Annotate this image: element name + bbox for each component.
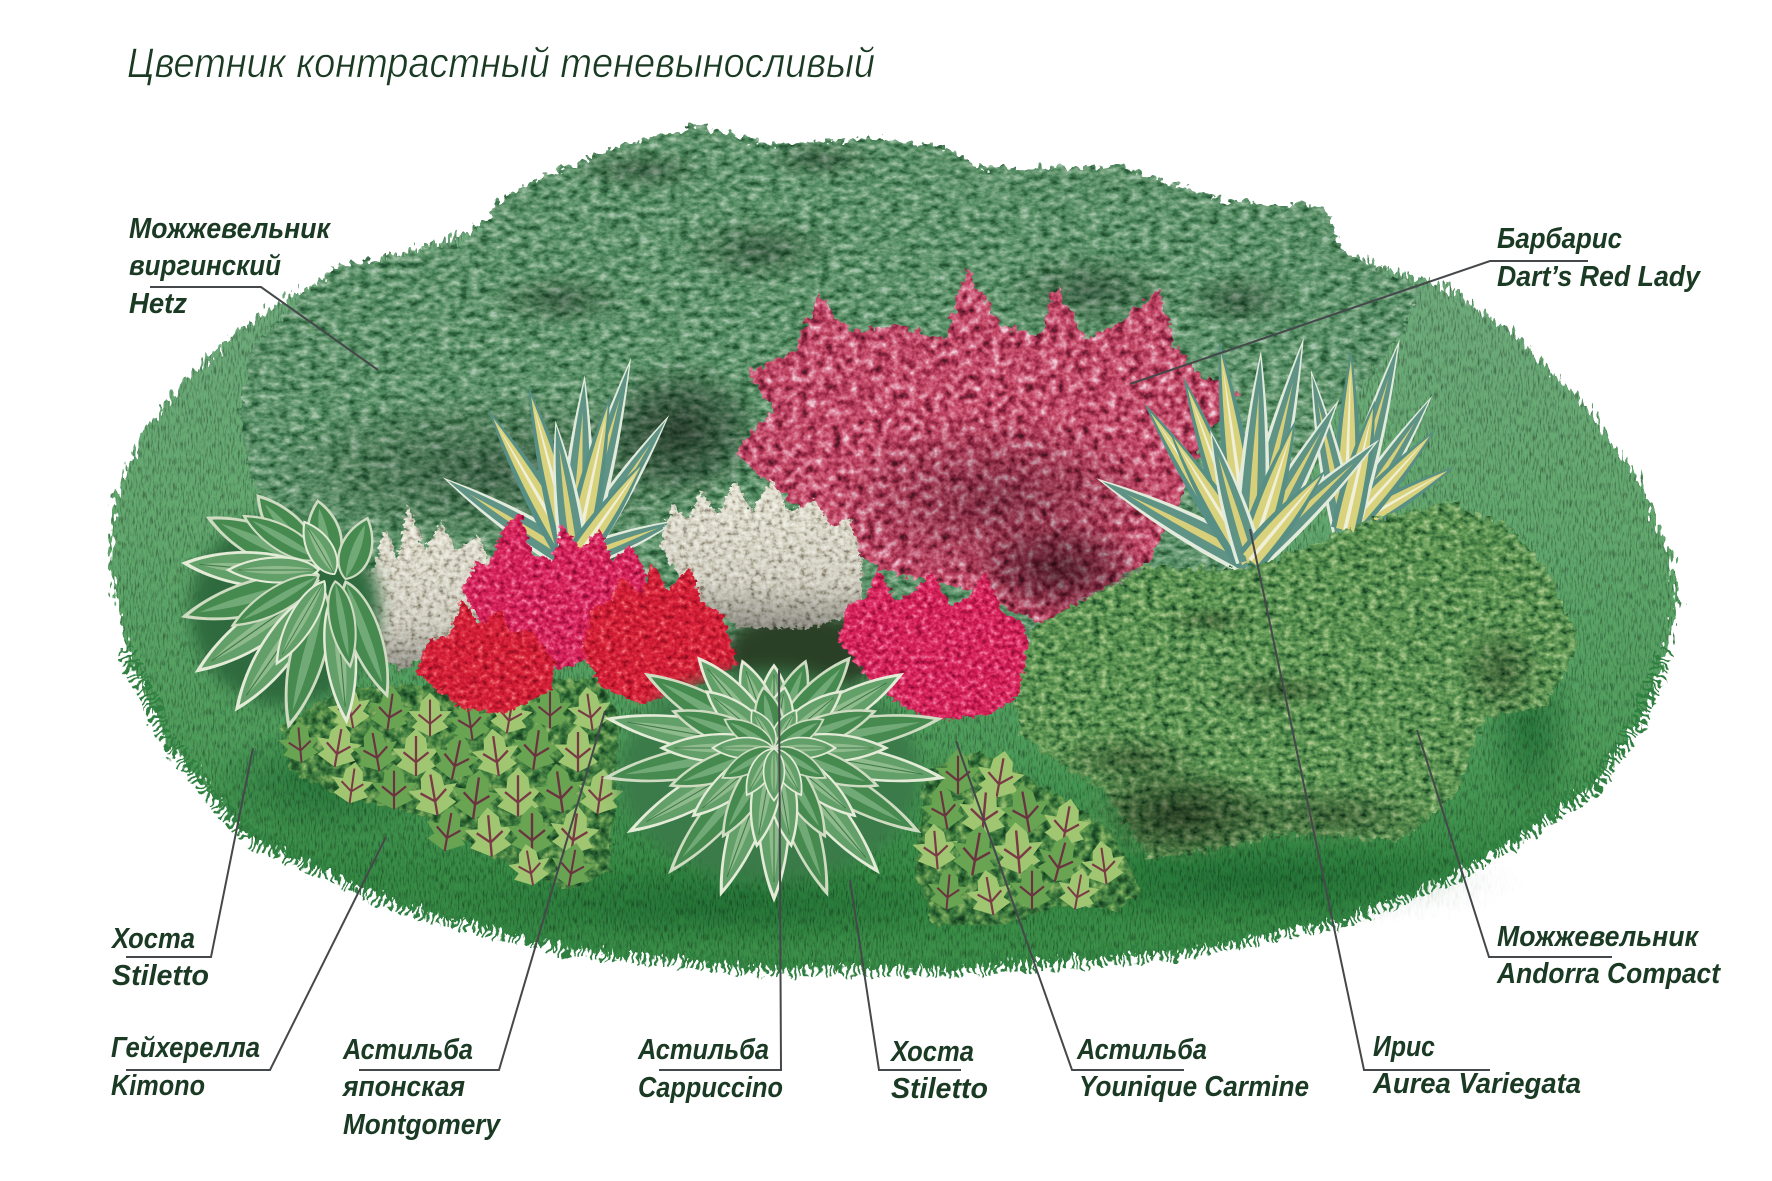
plant: Virginia juniper Hetz bbox=[240, 125, 1420, 680]
label: iris Aurea Variegata: Aurea Variegata bbox=[1372, 1068, 1581, 1100]
label: hosta Stiletto, left: Хоста bbox=[110, 923, 195, 955]
plant: juniper Andorra Compact bbox=[1017, 502, 1580, 865]
label: juniper Andorra Compact: Andorra Compact bbox=[1496, 958, 1721, 990]
label: hosta Stiletto, centre bbox=[850, 880, 988, 1105]
label: juniper Andorra Compact bbox=[1417, 730, 1721, 990]
plant: astilbe Montgomery, red right bbox=[582, 562, 738, 704]
plant: astilbe Montgomery, magenta bbox=[462, 512, 648, 670]
label: juniper Andorra Compact: Можжевельник bbox=[1497, 921, 1699, 953]
label: hosta Stiletto, centre: Stiletto bbox=[891, 1073, 988, 1105]
label: heuchera Kimono: Гейхерелла bbox=[111, 1032, 260, 1064]
plant: hosta Stiletto, left bbox=[176, 483, 404, 734]
label: astilbe Cappuccino: Астильба bbox=[637, 1034, 769, 1066]
label: barberry Dart's Red Lady: Барбарис bbox=[1497, 223, 1622, 255]
label: astilbe Cappuccino bbox=[637, 670, 783, 1104]
plant: heuchera Kimono, left patch bbox=[277, 680, 626, 890]
label: astilbe Cappuccino: Cappuccino bbox=[638, 1072, 783, 1104]
plant: astilbe Montgomery, red left bbox=[416, 600, 555, 713]
label: astilbe Montgomery: Montgomery bbox=[343, 1109, 502, 1141]
lawn disc bbox=[109, 170, 1679, 968]
label: astilbe Montgomery: японская bbox=[341, 1071, 465, 1103]
label: astilbe Younique Carmine: Астильба bbox=[1076, 1034, 1207, 1066]
plant: heuchera Kimono, right patch bbox=[911, 747, 1142, 925]
plant: iris Aurea Variegata, left clump bbox=[434, 353, 684, 573]
label: astilbe Montgomery: Астильба bbox=[342, 1034, 473, 1066]
label: hosta Stiletto, left bbox=[110, 748, 253, 992]
plant: dark astilbe foliage bbox=[725, 610, 875, 700]
label: juniper Hetz: виргинский bbox=[129, 250, 281, 282]
label: hosta Stiletto, centre: Хоста bbox=[889, 1036, 974, 1068]
label: juniper Hetz bbox=[129, 213, 378, 370]
label: barberry Dart's Red Lady: Dart’s Red Lady bbox=[1497, 261, 1702, 293]
plant: astilbe Cappuccino, right bbox=[660, 478, 862, 628]
label: hosta Stiletto, left: Stiletto bbox=[112, 960, 209, 992]
plant: astilbe Younique Carmine bbox=[838, 568, 1040, 721]
label: astilbe Younique Carmine: Younique Carmine bbox=[1079, 1071, 1309, 1103]
plant: astilbe Cappuccino, left bbox=[340, 505, 492, 672]
plant: barberry Dart's Red Lady bbox=[733, 267, 1238, 625]
title: Цветник контрастный теневыносливый bbox=[127, 39, 875, 86]
label: barberry Dart's Red Lady bbox=[1130, 223, 1702, 384]
label: iris Aurea Variegata bbox=[1250, 529, 1581, 1100]
plant: iris Aurea Variegata, right clump bbox=[1089, 333, 1460, 575]
label: astilbe Younique Carmine bbox=[956, 741, 1309, 1103]
plant: hosta Stiletto, centre bbox=[599, 646, 949, 903]
label: iris Aurea Variegata: Ирис bbox=[1373, 1031, 1435, 1063]
label: juniper Hetz: Hetz bbox=[129, 288, 187, 320]
label: astilbe Montgomery bbox=[341, 711, 605, 1141]
label: juniper Hetz: Можжевельник bbox=[129, 213, 331, 245]
label: heuchera Kimono: Kimono bbox=[111, 1070, 205, 1102]
label: heuchera Kimono bbox=[111, 837, 386, 1102]
